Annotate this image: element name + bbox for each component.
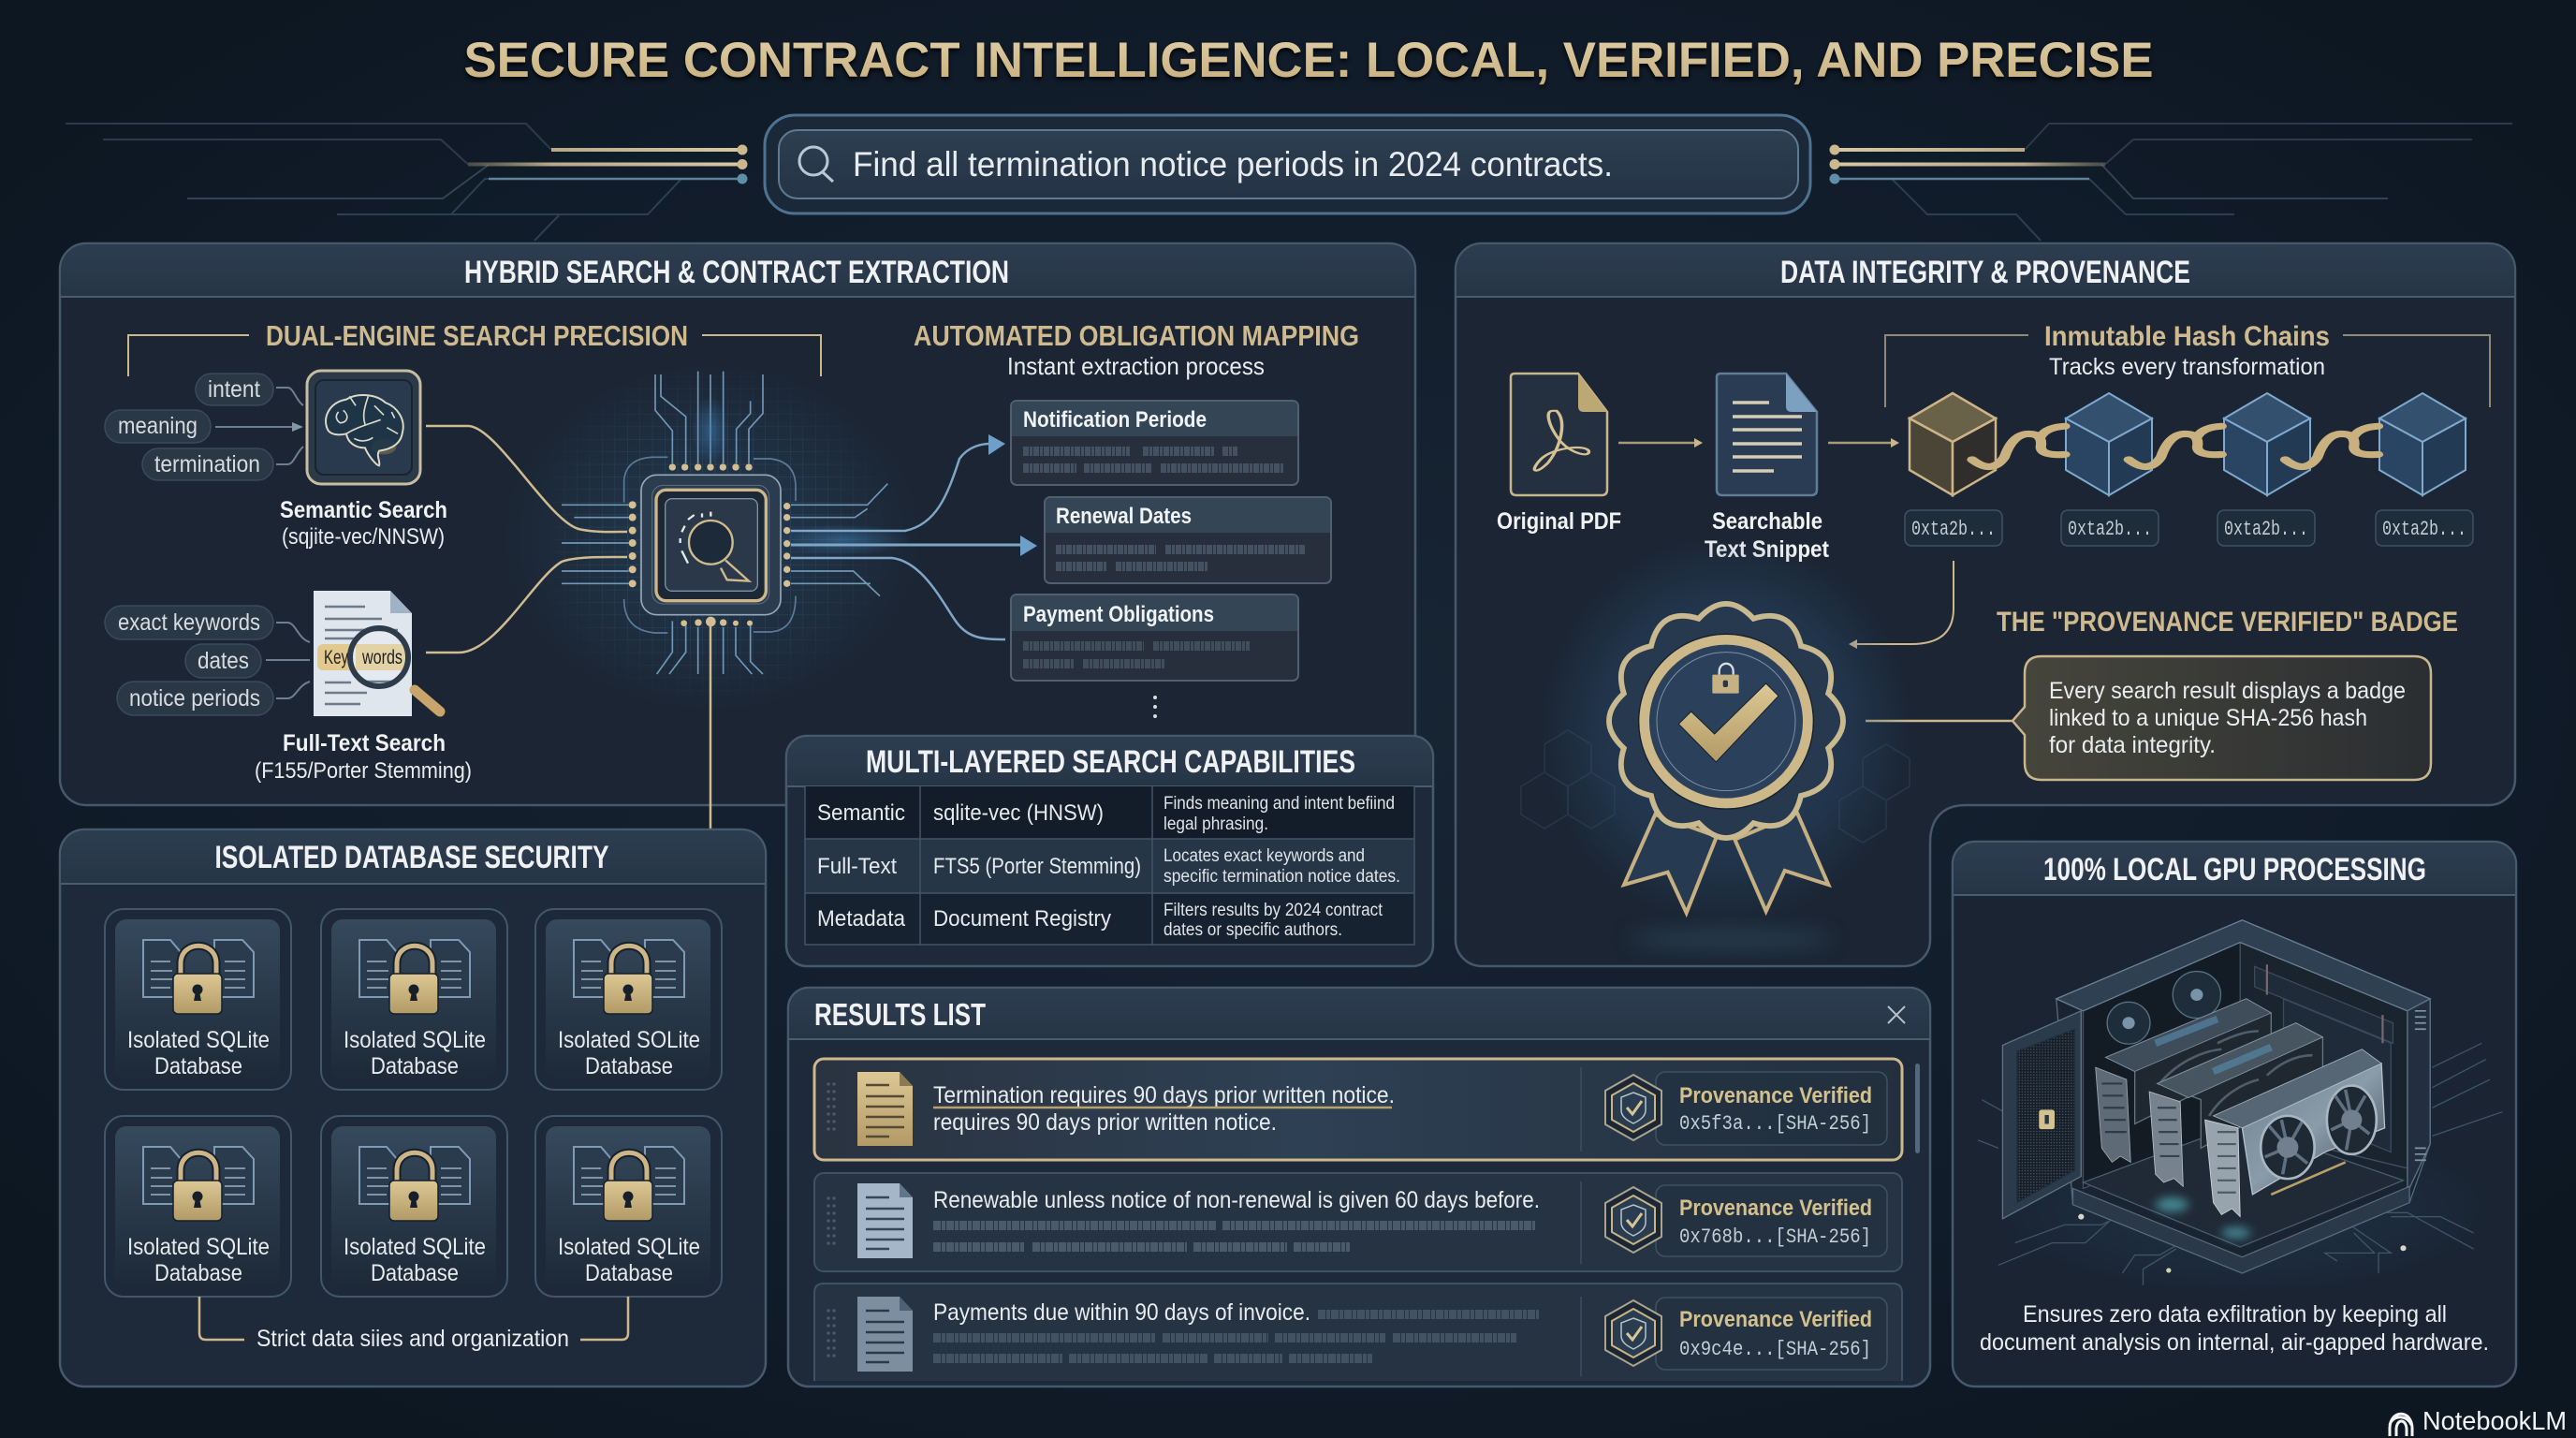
central chip [550, 371, 906, 698]
database card 1: Isolated SQLite [127, 1027, 270, 1053]
panel: isolated database security [60, 829, 766, 1387]
heading: DATA INTEGRITY & PROVENANCE [1780, 255, 2190, 290]
ellipsis [1153, 696, 1157, 718]
label: full-text search [255, 730, 472, 784]
fulltext keyword pills: dates [198, 648, 249, 674]
hash labels: 0xta2b... [2224, 518, 2308, 541]
row: full-text [817, 846, 1400, 887]
database card 1 [105, 909, 291, 1090]
panel: hybrid search [60, 243, 1415, 805]
row: semantic [817, 794, 1395, 834]
flow arrows [1618, 438, 1899, 448]
label: semantic search: (sqjite-vec/NNSW) [282, 524, 445, 550]
result text [933, 1299, 1539, 1358]
search query: Find all termination notice periods in 2024 contracts. [853, 145, 1613, 183]
blue arrows to cards [791, 434, 1037, 639]
row: metadata: Document Registry [933, 906, 1111, 932]
provenance chip: Provenance Verified [1679, 1196, 1872, 1221]
circuit traces right [1829, 124, 2512, 241]
heading: hash chains: Tracks every transformation [2049, 354, 2325, 380]
label: semantic search [280, 497, 447, 550]
provenance chip: Provenance Verified [1679, 1083, 1872, 1108]
panel: local gpu [1953, 842, 2516, 1387]
card: notification period: Notification Periode [1023, 407, 1207, 433]
fulltext keyword pills: notice periods [129, 685, 260, 712]
icon: text snippet [1705, 374, 1830, 563]
description: Ensures zero data exfiltration by keeping all [2023, 1301, 2447, 1328]
server case [2056, 920, 2430, 1273]
result text [933, 1082, 1395, 1136]
card: renewal dates [1045, 497, 1331, 583]
icon: verified badge [1539, 534, 1913, 945]
gpu card front [2205, 1049, 2385, 1217]
card: notification period [1011, 401, 1298, 485]
hash labels: 0xta2b... [2068, 518, 2152, 541]
row: semantic: Semantic [817, 800, 905, 826]
description: document analysis on internal, air-gapped hardware. [1980, 1329, 2489, 1356]
row: metadata: Filters results by 2024 contract [1164, 901, 1383, 920]
callout [1866, 656, 2431, 780]
database card 1: Database [154, 1053, 242, 1079]
row: full-text: FTS5 (Porter Stemming) [933, 854, 1141, 879]
heading: ISOLATED DATABASE SECURITY [215, 840, 609, 875]
heading: 100% LOCAL GPU PROCESSING [2043, 852, 2426, 888]
organization note [199, 1297, 628, 1352]
row: full-text: specific termination notice dates. [1164, 867, 1400, 887]
heading: MULTI-LAYERED SEARCH CAPABILITIES [866, 744, 1355, 780]
label: Text Snippet [1705, 536, 1830, 563]
server illustration [1978, 920, 2502, 1298]
callout: Every search result displays a badge [2049, 678, 2406, 704]
row: full-text: Locates exact keywords and [1164, 846, 1365, 866]
connector to badge [1849, 561, 1954, 649]
panel: data integrity [1456, 243, 2515, 966]
callout: for data integrity. [2049, 732, 2216, 758]
label: full-text search: (F155/Porter Stemming) [255, 758, 472, 784]
provenance chip: 0x768b...[SHA-256] [1679, 1225, 1871, 1249]
icon: original pdf [1497, 374, 1621, 535]
result text: requires 90 days prior written notice. [933, 1109, 1277, 1136]
label: Searchable [1712, 508, 1822, 535]
database card 3: Isolated SOLite [558, 1027, 700, 1053]
database card 6: Isolated SQLite [558, 1234, 700, 1260]
heading: hash chains: Inmutable Hash Chains [2044, 321, 2330, 352]
description [1980, 1301, 2489, 1356]
heading: hash chains [1885, 321, 2490, 407]
database card 5: Database [371, 1260, 459, 1286]
database card 6: Database [585, 1260, 673, 1286]
heading: RESULTS LIST [814, 997, 986, 1032]
subheading: dual-engine [128, 319, 821, 376]
database card 3: Database [585, 1053, 673, 1079]
result row 3 [814, 1284, 1902, 1381]
subheading: automated mapping [914, 319, 1359, 380]
gpu card middle [2149, 1023, 2322, 1186]
icon: keyword document [314, 591, 440, 716]
icon: brain [307, 371, 420, 484]
decorative hexagons [1521, 730, 1910, 843]
database card 2: Isolated SQLite [344, 1027, 486, 1053]
database card 3 [535, 909, 722, 1090]
provenance chip: 0x9c4e...[SHA-256] [1679, 1338, 1871, 1361]
search bar [765, 115, 1810, 213]
semantic keyword pills: intent [208, 376, 260, 403]
card: payment obligations [1011, 594, 1298, 681]
logo: notebooklm: NotebookLM [2422, 1406, 2567, 1435]
database card 4: Database [154, 1260, 242, 1286]
row: metadata [817, 901, 1383, 940]
gpu card rear [2096, 999, 2271, 1162]
provenance chip: Provenance Verified [1679, 1307, 1872, 1332]
organization note: Strict data siies and organization [256, 1326, 569, 1352]
open door [2002, 1011, 2081, 1219]
gold connectors into chip [426, 426, 627, 653]
card: payment obligations: Payment Obligations [1023, 602, 1214, 627]
subheading: automated mapping: Instant extraction process [1007, 352, 1265, 380]
database card 4: Isolated SQLite [127, 1234, 270, 1260]
label: semantic search: Semantic Search [280, 497, 447, 523]
fulltext keyword pills: exact keywords [118, 609, 260, 636]
fulltext keyword pills [105, 606, 310, 715]
icon: magnifier in chip [681, 512, 749, 581]
icon: magnifier [799, 147, 833, 182]
result row 2 [814, 1173, 1902, 1271]
database card 5: Isolated SQLite [344, 1234, 486, 1260]
result text: Payments due within 90 days of invoice. [933, 1299, 1310, 1326]
row: semantic: legal phrasing. [1164, 814, 1268, 834]
row: metadata: Metadata [817, 906, 906, 932]
semantic keyword pills [105, 374, 303, 480]
hash labels: 0xta2b... [1911, 518, 1996, 541]
hash labels: 0xta2b... [2382, 518, 2466, 541]
database card 6 [535, 1116, 722, 1297]
result text: Renewable unless notice of non-renewal is given 60 days before. [933, 1187, 1540, 1213]
database card 2 [321, 909, 507, 1090]
hash chain blocks [1910, 393, 2466, 495]
gold link to database panel [710, 623, 711, 830]
row: semantic: sqlite-vec (HNSW) [933, 800, 1104, 826]
provenance chip: 0x5f3a...[SHA-256] [1679, 1112, 1871, 1136]
card: renewal dates: Renewal Dates [1056, 504, 1192, 529]
label [1705, 508, 1830, 563]
semantic keyword pills: meaning [118, 413, 198, 439]
scrollbar [1915, 1064, 1920, 1153]
database card 2: Database [371, 1053, 459, 1079]
result text [933, 1187, 1540, 1247]
icon: keyword document: words [361, 647, 402, 668]
provenance chip [1656, 1298, 1887, 1370]
semantic keyword pills: termination [154, 451, 260, 477]
result row 1 [814, 1059, 1902, 1160]
callout: linked to a unique SHA-256 hash [2049, 705, 2367, 731]
icon: close [1888, 1006, 1905, 1023]
icon: keyword document: Key [324, 647, 348, 668]
title: SECURE CONTRACT INTELLIGENCE: LOCAL, VERIFIED, AND PRECISE [464, 33, 2153, 88]
label: full-text search: Full-Text Search [283, 730, 446, 756]
row: metadata: dates or specific authors. [1164, 920, 1342, 940]
database card 5 [321, 1116, 507, 1297]
subheading: dual-engine: DUAL-ENGINE SEARCH PRECISION [266, 319, 688, 352]
panel: results list [788, 988, 1930, 1387]
subheading: automated mapping: AUTOMATED OBLIGATION MAPPING [914, 319, 1359, 352]
label: Original PDF [1497, 508, 1621, 535]
row: full-text: Full-Text [817, 854, 897, 879]
circuit traces left [66, 124, 747, 241]
panel: multi-layered capabilities [786, 736, 1433, 966]
hash labels [1905, 510, 2473, 546]
row: semantic: Finds meaning and intent befiind [1164, 794, 1395, 814]
result text: Termination requires 90 days prior written notice. [933, 1082, 1395, 1108]
heading: badge: THE "PROVENANCE VERIFIED" BADGE [1997, 607, 2458, 638]
table [805, 786, 1414, 945]
provenance chip [1656, 1072, 1887, 1145]
provenance chip [1656, 1185, 1887, 1256]
heading: HYBRID SEARCH & CONTRACT EXTRACTION [464, 255, 1009, 290]
database card 4 [105, 1116, 291, 1297]
